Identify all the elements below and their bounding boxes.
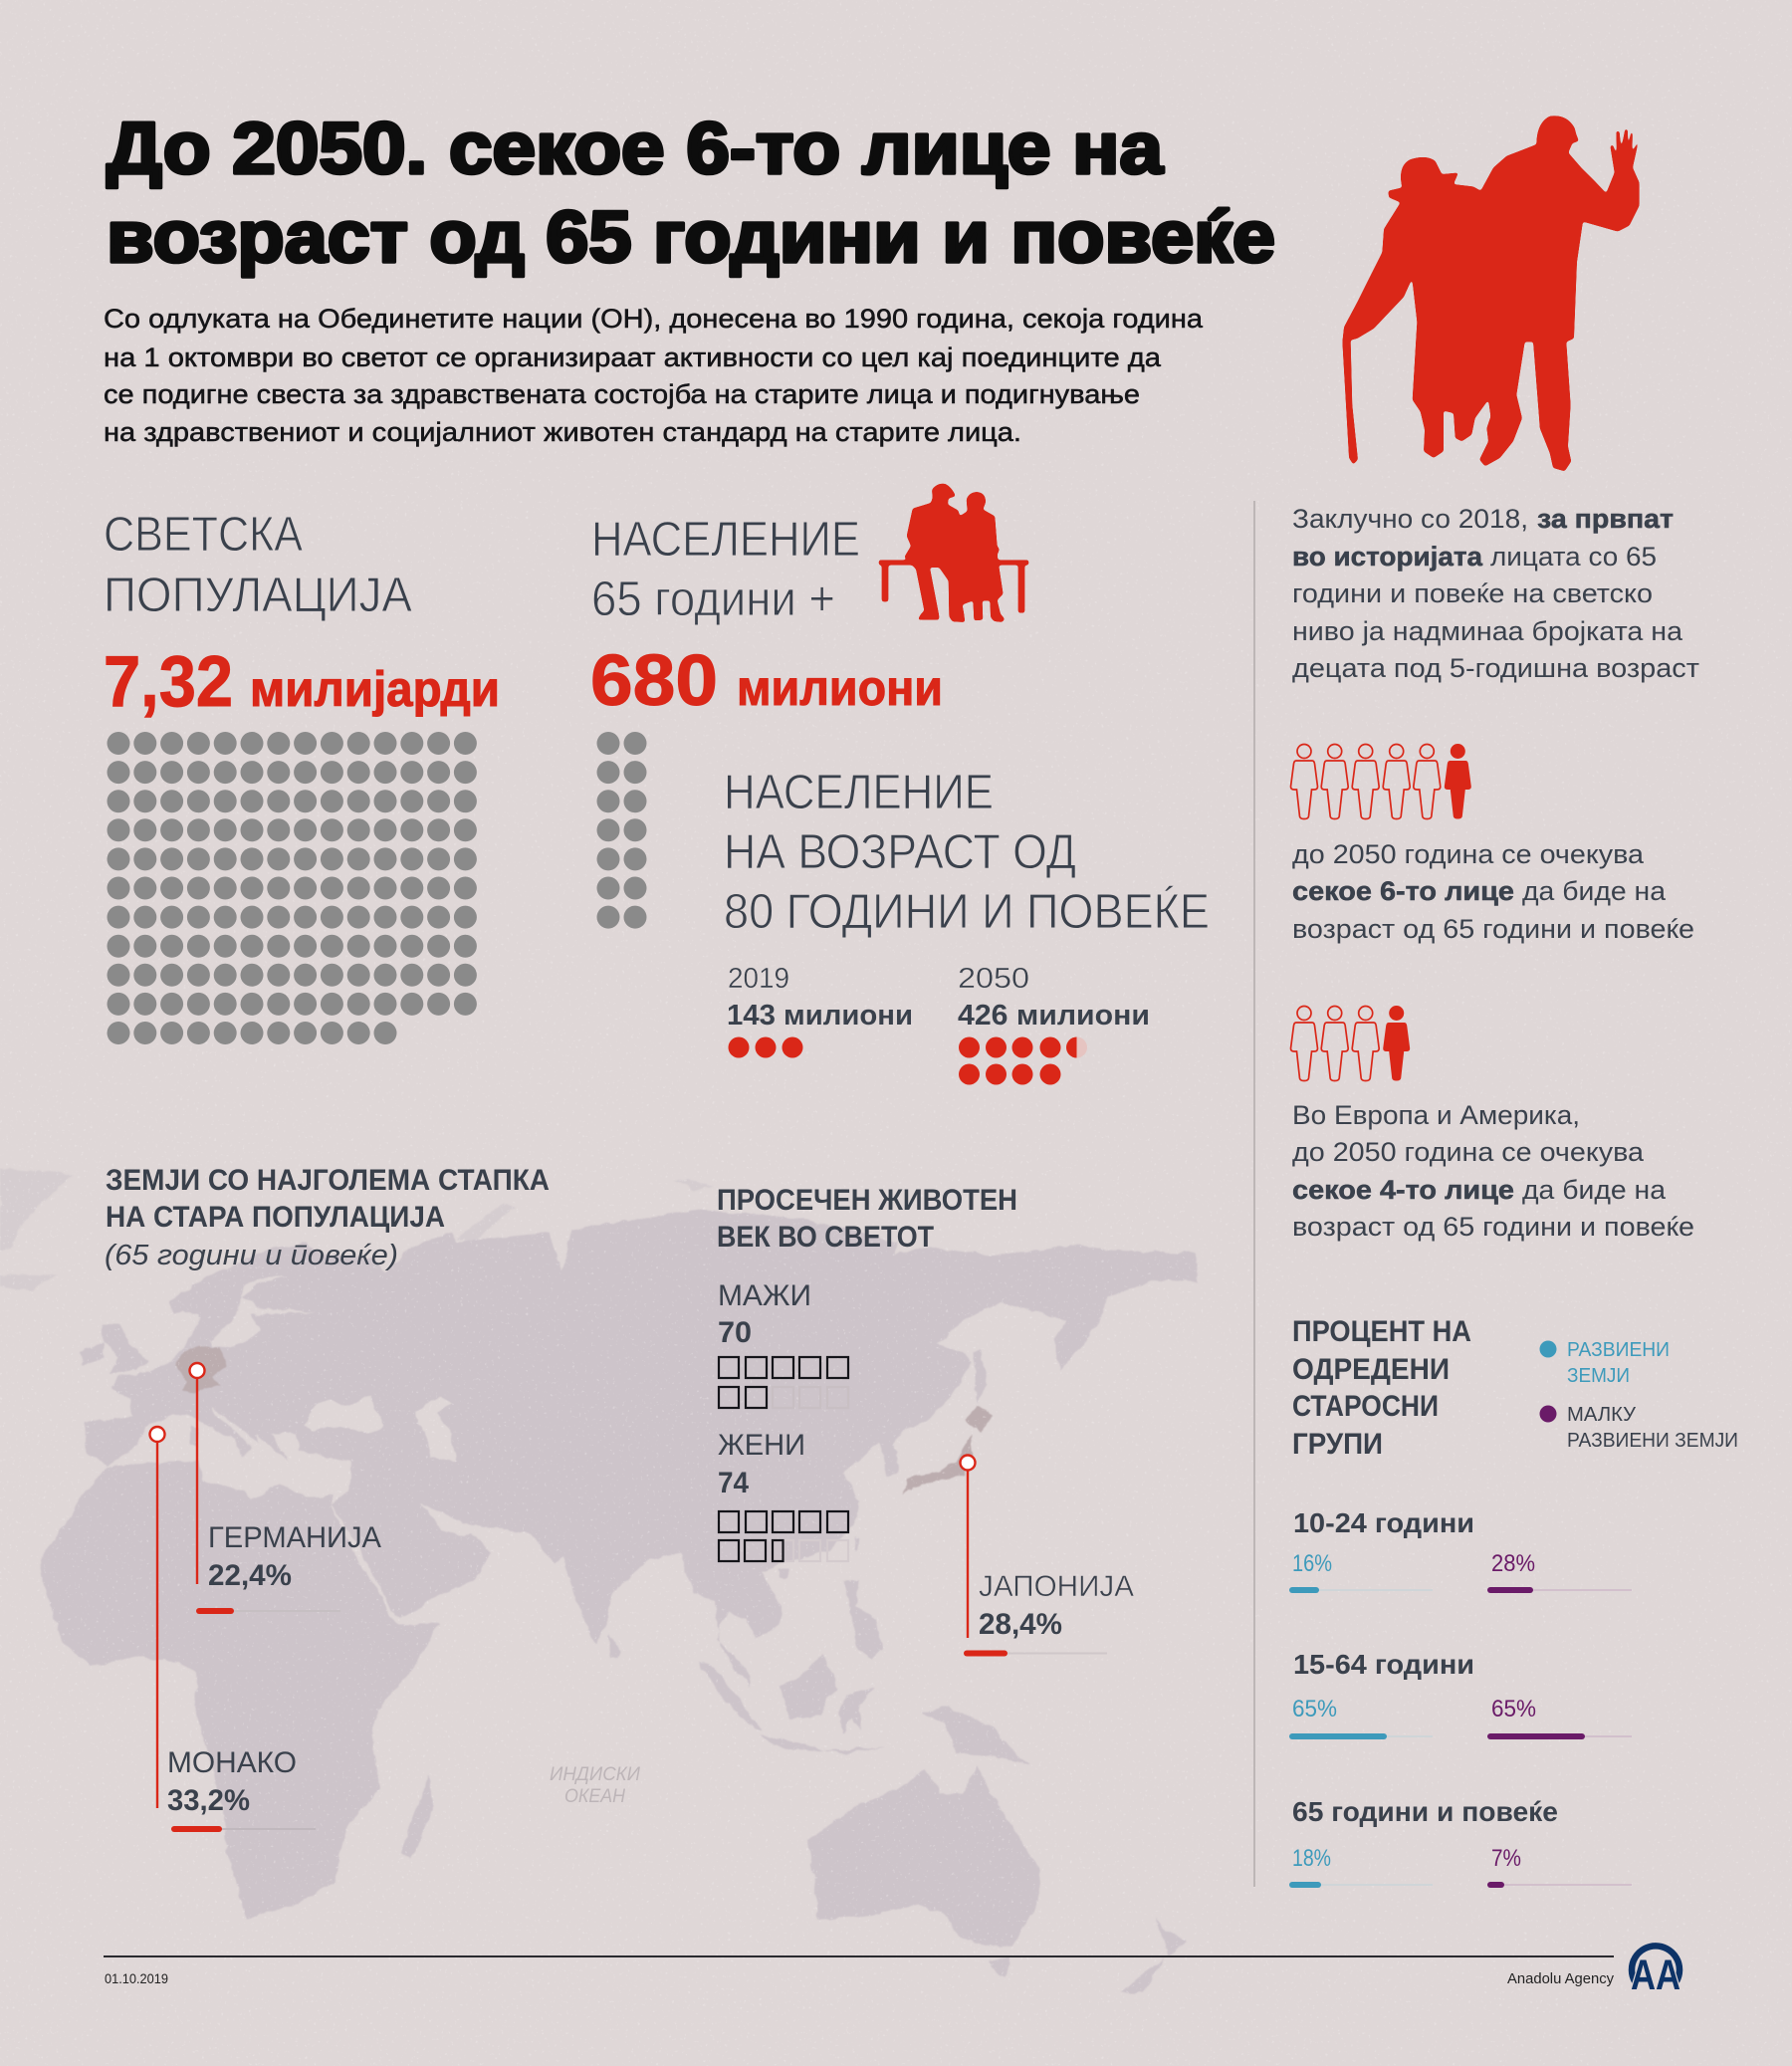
heading: life expectancy: ПРОСЕЧЕН ЖИВОТЕН (717, 1184, 1017, 1217)
credit: Anadolu Agency (1507, 1970, 1614, 1987)
group: 15-64 years: 65% (1491, 1696, 1536, 1722)
marker: Germany (189, 1363, 381, 1611)
heading: population 80+: НАСЕЛЕНИЕ (724, 766, 994, 819)
dot grid: world population (118, 743, 466, 1033)
text block: every 4th person: да биде на (1522, 1175, 1667, 1205)
icon: one in four people (1290, 1006, 1410, 1081)
stat: 2050 (958, 963, 1150, 1085)
figure: 7.32 billion (104, 642, 500, 722)
marker: Monaco: 33,2% (167, 1784, 250, 1817)
legend: ЗЕМЈИ (1567, 1365, 1630, 1387)
heading: life expectancy: ВЕК ВО СВЕТОТ (717, 1221, 934, 1254)
title (107, 109, 1275, 278)
panel: population 80+ (724, 766, 1210, 1085)
stat: women 74: 74 (718, 1467, 749, 1499)
heading: population 80+: 80 ГОДИНИ И ПОВЕЌЕ (724, 885, 1210, 939)
group: 15-64 years (1289, 1649, 1632, 1736)
heading: countries with the oldest population (105, 1164, 550, 1271)
stat: men 70: 70 (718, 1316, 752, 1349)
heading: countries with the oldest population: ЗЕМЈИ СО НАЈГОЛЕМА СТАПКА (106, 1164, 550, 1197)
marker: Germany: 22,4% (208, 1559, 292, 1592)
marker: Japan: ЈАПОНИЈА (979, 1570, 1134, 1603)
ocean label: ИНДИСКИ (550, 1764, 640, 1785)
stat: 2019: 143 милиони (727, 1000, 913, 1032)
intro paragraph: на 1 октомври во светот се организираат активности со цел кај поединците да (104, 343, 1161, 372)
stat: men 70 (718, 1279, 848, 1408)
group: 65 years and over (1289, 1796, 1632, 1885)
group: 10-24 years: 16% (1292, 1550, 1332, 1577)
icon: elderly couple silhouette (1342, 115, 1640, 471)
heading: population 80+ (724, 766, 1210, 939)
text block: every 6th person: секое 6-то лице (1292, 876, 1514, 906)
marker: Japan (960, 1456, 1134, 1653)
group: 10-24 years (1289, 1507, 1632, 1590)
intro paragraph (104, 304, 1203, 447)
text block: first time in history: години и повеќе на светско (1292, 578, 1653, 608)
heading: age groups: ГРУПИ (1292, 1428, 1383, 1461)
panel: population 65+ (590, 484, 1028, 917)
panel: life expectancy (717, 1184, 1017, 1561)
stat: 2019 (727, 963, 913, 1057)
intro paragraph: се подигне свеста за здравствената состојба на старите лица и подигнување (104, 379, 1140, 409)
text block: every 4th person: секое 4-то лице (1292, 1175, 1514, 1205)
stat: women 74: ЖЕНИ (718, 1429, 805, 1462)
marker: Monaco: МОНАКО (167, 1746, 297, 1779)
text block: every 6th person: да биде на (1522, 876, 1667, 906)
marker: Monaco (149, 1427, 316, 1829)
stat: 2019: 2019 (728, 963, 789, 995)
heading: countries with the oldest population: (65 години и повеќе) (105, 1240, 398, 1271)
group: 10-24 years: 10-24 години (1293, 1507, 1474, 1538)
group: 65 years and over: 65 години и повеќе (1292, 1796, 1558, 1827)
logo: Anadolu Agency: AA (1631, 1951, 1680, 1999)
dot column: population 65+ (608, 743, 636, 917)
text block: first time in history: Заклучно со 2018, (1292, 504, 1528, 534)
text block: first time in history: лицата со 65 (1490, 542, 1657, 572)
ocean label (550, 1764, 640, 1807)
stat: men 70: МАЖИ (718, 1279, 811, 1312)
figure: 7.32 billion: 7,32 (104, 642, 233, 722)
text block: every 4th person (1292, 1100, 1694, 1242)
heading: age groups (1292, 1315, 1471, 1461)
figure: 680 million: милиони (737, 660, 943, 716)
legend: РАЗВИЕНИ ЗЕМЈИ (1567, 1430, 1738, 1452)
text block: first time in history: ниво ја надминаа бројката на (1292, 616, 1683, 646)
stat: women 74 (718, 1429, 848, 1561)
panel: age groups (1289, 1315, 1738, 1885)
panel: countries with the oldest population (105, 1164, 1134, 1829)
heading: world population: ПОПУЛАЦИЈА (104, 569, 412, 622)
text block: first time in history: во историјата (1292, 542, 1483, 572)
date: 01.10.2019 (105, 1970, 168, 1986)
intro paragraph: на здравствениот и социјалниот животен стандард на старите лица. (104, 417, 1021, 447)
intro paragraph: Со одлуката на Обединетите нации (ОН), донесена во 1990 година, секоја година (104, 304, 1203, 334)
heading: age groups: СТАРОСНИ (1292, 1390, 1439, 1423)
stat: 2050: 2050 (958, 963, 1029, 995)
marker: Germany: ГЕРМАНИЈА (208, 1521, 381, 1554)
heading: age groups: ОДРЕДЕНИ (1292, 1353, 1450, 1386)
title: До 2050. секое 6-то лице на (107, 109, 1164, 189)
panel: world population (104, 508, 500, 1033)
stat: 2050: 426 милиони (958, 1000, 1150, 1032)
group: 10-24 years: 28% (1491, 1550, 1535, 1577)
group: 65 years and over: 7% (1491, 1845, 1521, 1872)
group: 15-64 years: 65% (1292, 1696, 1337, 1722)
heading: population 65+ (591, 513, 860, 626)
group: 65 years and over: 18% (1292, 1845, 1331, 1872)
heading: population 65+: 65 години + (591, 573, 835, 626)
heading: age groups: ПРОЦЕНТ НА (1292, 1315, 1471, 1348)
text block: every 6th person: до 2050 година се очекува (1292, 839, 1645, 869)
text block: every 4th person: Во Европа и Америка, (1292, 1100, 1580, 1130)
icon: couple on a bench (879, 484, 1028, 622)
world map background (0, 1168, 1198, 1992)
text block: every 6th person (1292, 839, 1694, 944)
heading: countries with the oldest population: НА СТАРА ПОПУЛАЦИЈА (106, 1201, 445, 1234)
divider (1253, 501, 1255, 1887)
icon: one in six people (1290, 744, 1471, 818)
text block: first time in history: децата под 5-годишна возраст (1292, 653, 1699, 683)
text block: first time in history: за првпат (1537, 504, 1674, 534)
text block: every 6th person: возраст од 65 години и повеќе (1292, 914, 1694, 944)
figure: 7.32 billion: милијарди (250, 661, 500, 717)
heading: population 65+: НАСЕЛЕНИЕ (591, 513, 860, 567)
group: 15-64 years: 15-64 години (1293, 1649, 1474, 1680)
text block: every 4th person: возраст од 65 години и повеќе (1292, 1212, 1694, 1242)
heading: world population (104, 508, 412, 622)
figure: 680 million (590, 641, 943, 721)
figure: 680 million: 680 (590, 641, 718, 721)
heading: life expectancy (717, 1184, 1017, 1254)
text block: every 4th person: до 2050 година се очекува (1292, 1137, 1645, 1167)
heading: population 80+: НА ВОЗРАСТ ОД (724, 825, 1076, 879)
marker: Japan: 28,4% (979, 1608, 1062, 1641)
ocean label: ОКЕАН (564, 1786, 625, 1807)
text block: first time in history (1292, 504, 1699, 683)
legend: РАЗВИЕНИ (1567, 1339, 1670, 1361)
legend (1539, 1339, 1738, 1452)
legend: МАЛКУ (1567, 1404, 1636, 1426)
title: возраст од 65 години и повеќе (107, 197, 1275, 278)
heading: world population: СВЕТСКА (104, 508, 303, 562)
